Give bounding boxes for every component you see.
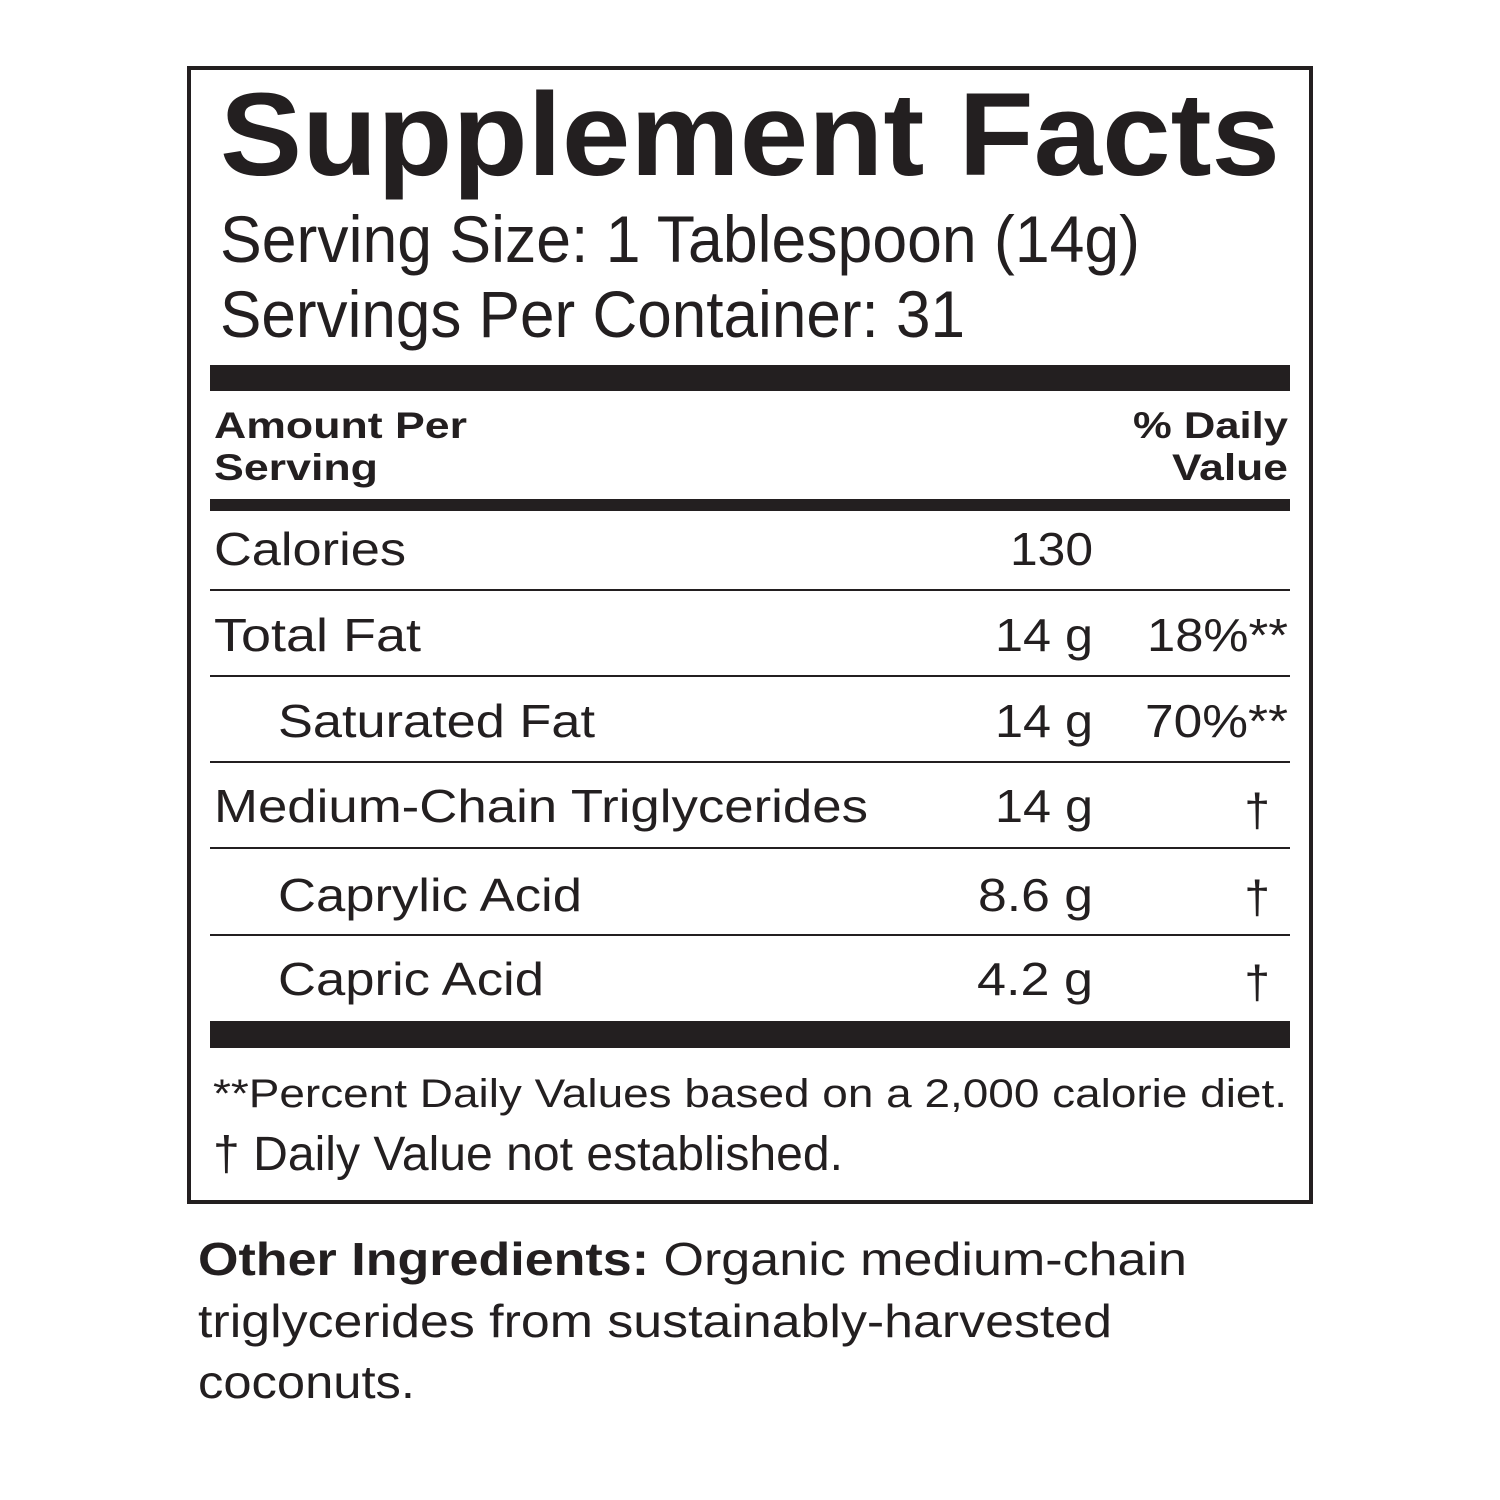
nutrient rows: Caprylic Acid xyxy=(278,869,582,921)
nutrient rows: † xyxy=(1244,956,1270,1008)
nutrient rows: Capric Acid xyxy=(278,953,544,1005)
nutrient rows: † xyxy=(1244,784,1270,836)
footnotes xyxy=(213,1072,1287,1181)
footnotes: † Daily Value not established. xyxy=(213,1128,843,1181)
nutrient rows: † xyxy=(1244,871,1270,923)
header: amount per serving xyxy=(214,405,1288,488)
nutrient rows: Medium-Chain Triglycerides xyxy=(214,780,868,832)
nutrient rows: Total Fat xyxy=(214,609,421,661)
nutrient rows xyxy=(210,523,1290,1008)
other ingredients: Other Ingredients: Organic medium-chain xyxy=(198,1233,1187,1285)
header: amount per serving: % Daily xyxy=(1133,405,1288,446)
nutrient rows: 8.6 g xyxy=(978,869,1093,921)
other ingredients: triglycerides from sustainably-harvested xyxy=(198,1295,1112,1347)
other ingredients: coconuts. xyxy=(198,1356,415,1408)
header: amount per serving: Value xyxy=(1172,447,1288,488)
title: Supplement Facts xyxy=(220,69,1280,201)
serving size: Serving Size: 1 Tablespoon (14g) xyxy=(220,202,1140,276)
footnotes: **Percent Daily Values based on a 2,000 calorie diet. xyxy=(213,1072,1287,1116)
header: amount per serving: Serving xyxy=(214,447,378,488)
nutrient rows: Saturated Fat xyxy=(278,695,595,747)
other ingredients xyxy=(198,1233,1187,1408)
servings per container: Servings Per Container: 31 xyxy=(220,277,965,351)
nutrient rows: 18%** xyxy=(1147,609,1288,661)
panel: supplement facts box xyxy=(189,68,1311,1202)
nutrient rows: 14 g xyxy=(995,780,1093,832)
nutrient rows: 14 g xyxy=(995,695,1093,747)
nutrient rows: 130 xyxy=(1010,523,1093,575)
nutrient rows: 4.2 g xyxy=(977,953,1093,1005)
nutrient rows: 14 g xyxy=(995,609,1093,661)
nutrient rows: Calories xyxy=(214,523,406,575)
nutrient rows: 70%** xyxy=(1145,695,1288,747)
header: amount per serving: Amount Per xyxy=(214,405,467,446)
